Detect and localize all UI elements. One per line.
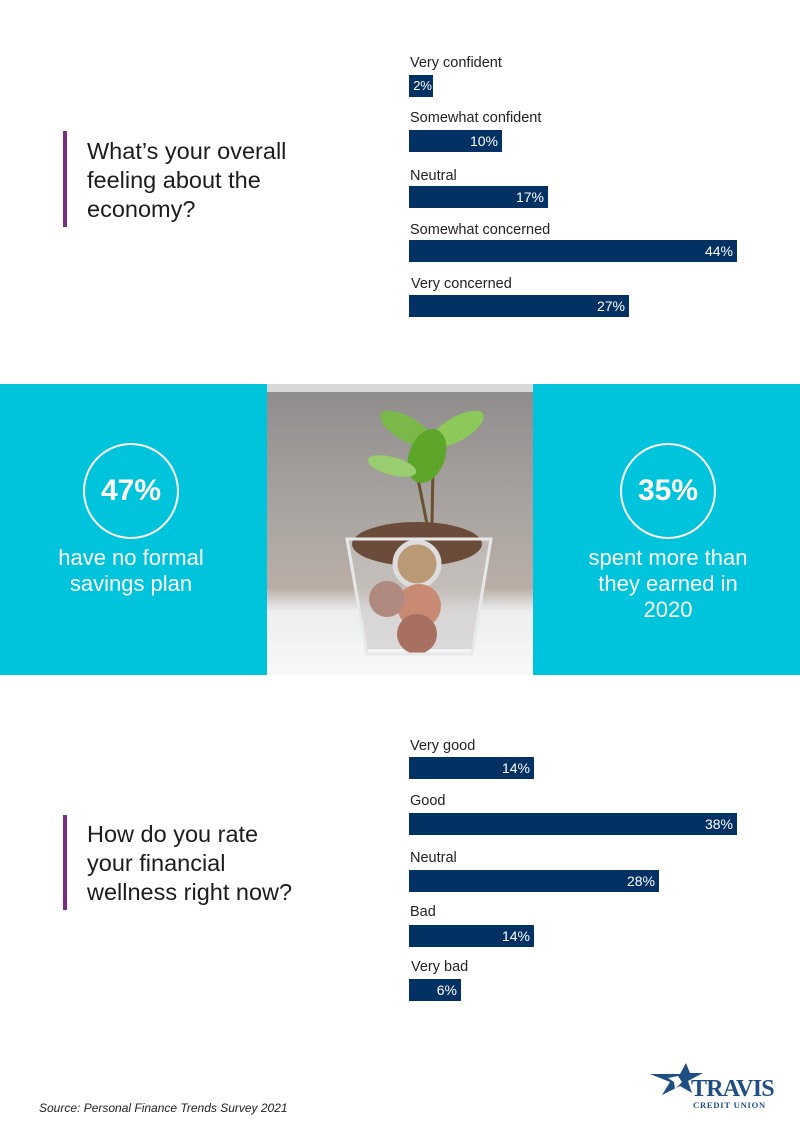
label very bad: Very bad xyxy=(411,959,468,975)
photo: plant in coin glass xyxy=(267,384,533,674)
bar 17% xyxy=(409,186,548,208)
label somewhat concerned: Somewhat concerned xyxy=(410,222,550,238)
question 1 heading: What’s your overall xyxy=(87,138,286,164)
circle 35%: 35% xyxy=(638,474,698,507)
bar 6%: 6% xyxy=(437,982,457,998)
circle 47%: 47% xyxy=(101,474,161,507)
panel: right stat xyxy=(533,384,800,675)
chart: financial wellness xyxy=(409,738,737,1001)
bar 2%: 2% xyxy=(413,78,432,93)
text: no savings plan: have no formal xyxy=(58,545,204,570)
bar 10% xyxy=(409,130,502,152)
bar 2% xyxy=(409,75,433,97)
question 2 heading: your financial xyxy=(87,850,225,876)
question 1 heading: feeling about the xyxy=(87,167,261,193)
bar 10%: 10% xyxy=(470,133,498,149)
text: spent more than earned xyxy=(588,545,747,622)
bar 38%: 38% xyxy=(705,816,733,832)
logo: Travis Credit Union: TRAVIS xyxy=(691,1076,774,1102)
label bad: Bad xyxy=(410,904,436,920)
circle 35% xyxy=(620,443,716,539)
label good: Good xyxy=(410,793,445,809)
logo: Travis Credit Union xyxy=(650,1063,774,1110)
panel: left stat xyxy=(0,384,267,675)
bar 14% xyxy=(409,925,534,947)
icon: star xyxy=(650,1063,703,1095)
bar 44%: 44% xyxy=(705,243,733,259)
chart: economy feeling xyxy=(409,55,737,317)
label somewhat confident: Somewhat confident xyxy=(410,110,541,126)
text: spent more than earned: they earned in xyxy=(598,571,738,596)
text: spent more than earned: spent more than xyxy=(588,545,747,570)
question 1 heading: economy? xyxy=(87,196,195,222)
bar 14% xyxy=(409,757,534,779)
bar 14%: 14% xyxy=(502,760,530,776)
label neutral: Neutral xyxy=(410,850,457,866)
label neutral: Neutral xyxy=(410,168,457,184)
question 2 heading: wellness right now? xyxy=(87,879,292,905)
bar 28%: 28% xyxy=(627,873,655,889)
bar 27%: 27% xyxy=(597,298,625,314)
bar 27% xyxy=(409,295,629,317)
bar 17%: 17% xyxy=(516,189,544,205)
bar 38% xyxy=(409,813,737,835)
source note: Source: Personal Finance Trends Survey 2021 xyxy=(39,1101,288,1115)
bar 14%: 14% xyxy=(502,928,530,944)
label very confident: Very confident xyxy=(410,55,502,71)
text: no savings plan: savings plan xyxy=(70,571,192,596)
label very good: Very good xyxy=(410,738,475,754)
text: spent more than earned: 2020 xyxy=(644,597,692,622)
question 2 heading: How do you rate xyxy=(87,821,258,847)
circle 47% xyxy=(83,443,179,539)
text: no savings plan xyxy=(58,545,204,596)
question 1 heading xyxy=(63,131,286,227)
label very concerned: Very concerned xyxy=(411,276,512,292)
logo: Travis Credit Union: CREDIT UNION xyxy=(693,1100,766,1110)
bar 44% xyxy=(409,240,737,262)
question 2 heading xyxy=(63,815,292,910)
bar 28% xyxy=(409,870,659,892)
bar 6% xyxy=(409,979,461,1001)
